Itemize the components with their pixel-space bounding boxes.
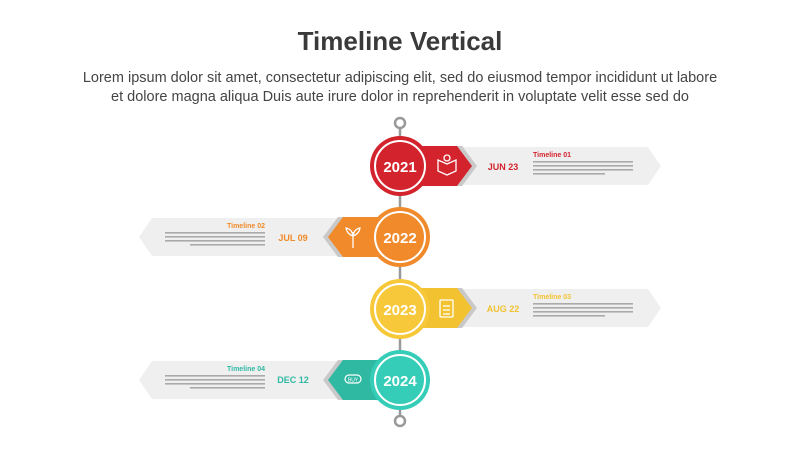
icon: book xyxy=(438,155,456,175)
step 4 xyxy=(139,350,430,410)
step 1: 2021 xyxy=(383,159,417,176)
icon: buy xyxy=(345,375,361,384)
subtitle: Lorem ipsum dolor sit amet, consectetur adipiscing elit, sed do eiusmod tempor incididunt ut labore xyxy=(83,70,717,86)
step 3: 2023 xyxy=(383,302,417,319)
step 3: Timeline 03 xyxy=(533,294,571,301)
step 4: Timeline 04 xyxy=(227,366,265,373)
icon: buy: BUY xyxy=(348,378,359,384)
title: Timeline Vertical xyxy=(298,26,502,56)
step 4: 2024 xyxy=(383,373,417,390)
subtitle xyxy=(83,70,717,105)
step 3 xyxy=(370,279,661,339)
step 1: Timeline 01 xyxy=(533,152,571,159)
step 2 xyxy=(139,207,430,267)
step 4: DEC 12 xyxy=(277,375,309,385)
step 2: Timeline 02 xyxy=(227,223,265,230)
subtitle: et dolore magna aliqua Duis aute irure dolor in reprehenderit in voluptate velit esse sed do xyxy=(111,89,689,105)
step 1: JUN 23 xyxy=(488,162,518,172)
step 2: 2022 xyxy=(383,230,417,247)
vertical line xyxy=(395,118,405,426)
step 2: JUL 09 xyxy=(278,233,308,243)
step 3: AUG 22 xyxy=(487,304,519,314)
step 1 xyxy=(370,136,661,196)
icon: clipboard xyxy=(440,300,453,317)
icon: plant xyxy=(346,228,360,248)
